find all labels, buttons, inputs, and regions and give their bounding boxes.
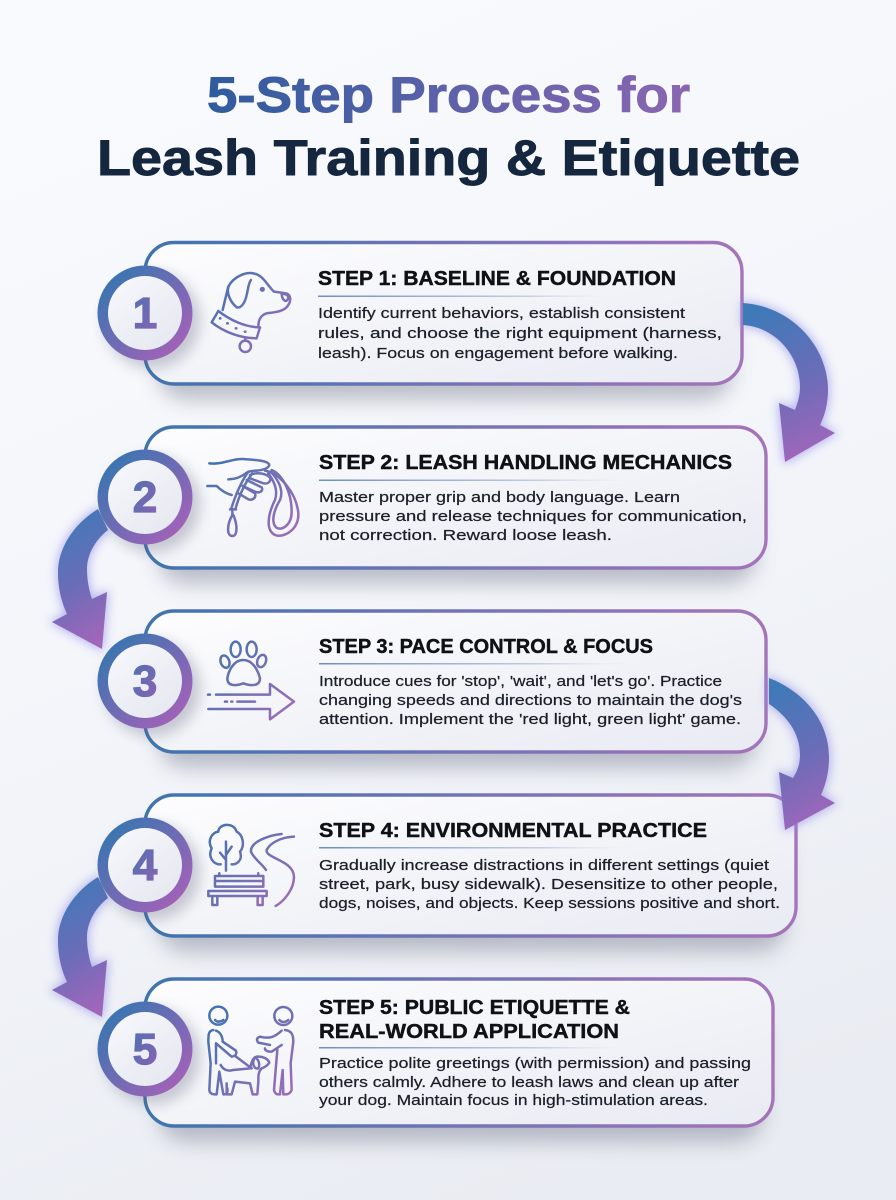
icon: two people greeting with a dog — [208, 1007, 293, 1094]
icon: dog head with collar — [212, 273, 290, 352]
step 2 description: Master proper grip and body language. Learn — [319, 489, 680, 506]
number badge 1: 1 — [133, 289, 157, 338]
step 3 description — [319, 673, 742, 728]
number badge 5 — [98, 1002, 200, 1104]
step 1 description: leash). Focus on engagement before walking. — [318, 345, 678, 362]
arrow: step 4 to step 5 — [52, 877, 108, 1017]
icon: hand holding leash — [207, 459, 298, 536]
arrow: step 2 to step 3 — [52, 509, 108, 649]
step 5 heading: REAL-WORLD APPLICATION — [319, 1020, 619, 1043]
step 5 description: others calmly. Adhere to leash laws and clean up after — [319, 1074, 739, 1091]
panel: step 3 — [145, 611, 766, 768]
step 3 heading: STEP 3: PACE CONTROL & FOCUS — [319, 635, 653, 658]
number badge 3 — [98, 634, 200, 736]
step 5 heading — [319, 996, 630, 1043]
step 5 heading: STEP 5: PUBLIC ETIQUETTE & — [319, 996, 630, 1019]
step 1 heading: STEP 1: BASELINE & FOUNDATION — [318, 267, 676, 290]
step 3 description: Introduce cues for 'stop', 'wait', and 'let's go'. Practice — [319, 673, 722, 690]
step 3 description: attention. Implement the 'red light, green light' game. — [319, 711, 741, 728]
step 4 heading: STEP 4: ENVIRONMENTAL PRACTICE — [319, 819, 707, 842]
step 4 description: Gradually increase distractions in different settings (quiet — [319, 857, 770, 874]
panel: step 5 — [145, 979, 773, 1142]
number badge 2: 2 — [133, 473, 157, 522]
title: Leash Training & Etiquette — [97, 130, 800, 186]
step 5 description: your dog. Maintain focus in high-stimulation areas. — [319, 1092, 708, 1109]
step 1 description: Identify current behaviors, establish consistent — [318, 305, 686, 322]
number badge 4: 4 — [133, 841, 158, 890]
panel: step 2 — [145, 427, 766, 584]
step 2 description: pressure and release techniques for communication, — [319, 508, 747, 525]
number badge 1 — [98, 266, 200, 368]
step 2 description: not correction. Reward loose leash. — [319, 527, 612, 544]
number badge 4 — [98, 818, 200, 920]
arrow: step 1 to step 2 — [743, 303, 835, 462]
step 2 description — [319, 489, 747, 544]
step 5 description — [319, 1055, 751, 1109]
step 1 description — [318, 305, 722, 362]
arrow: step 3 to step 4 — [769, 678, 835, 830]
panel: step 4 — [145, 795, 796, 952]
step 4 description — [319, 857, 780, 912]
step 1 description: rules, and choose the right equipment (harness, — [318, 325, 722, 342]
step 3 description: changing speeds and directions to maintain the dog's — [319, 692, 742, 709]
step 2 heading: STEP 2: LEASH HANDLING MECHANICS — [319, 451, 732, 474]
number badge 5: 5 — [133, 1025, 157, 1074]
step 4 description: dogs, noises, and objects. Keep sessions positive and short. — [319, 895, 780, 912]
panel: step 1 — [145, 242, 742, 400]
number badge 3: 3 — [133, 657, 157, 706]
title — [97, 67, 800, 186]
number badge 2 — [98, 450, 200, 552]
title: 5-Step Process for — [207, 67, 690, 123]
step 4 description: street, park, busy sidewalk). Desensitize to other people, — [319, 876, 778, 893]
step 5 description: Practice polite greetings (with permission) and passing — [319, 1055, 751, 1072]
icon: paw with speed arrow — [208, 642, 294, 719]
icon: tree, bench and path — [208, 825, 294, 906]
